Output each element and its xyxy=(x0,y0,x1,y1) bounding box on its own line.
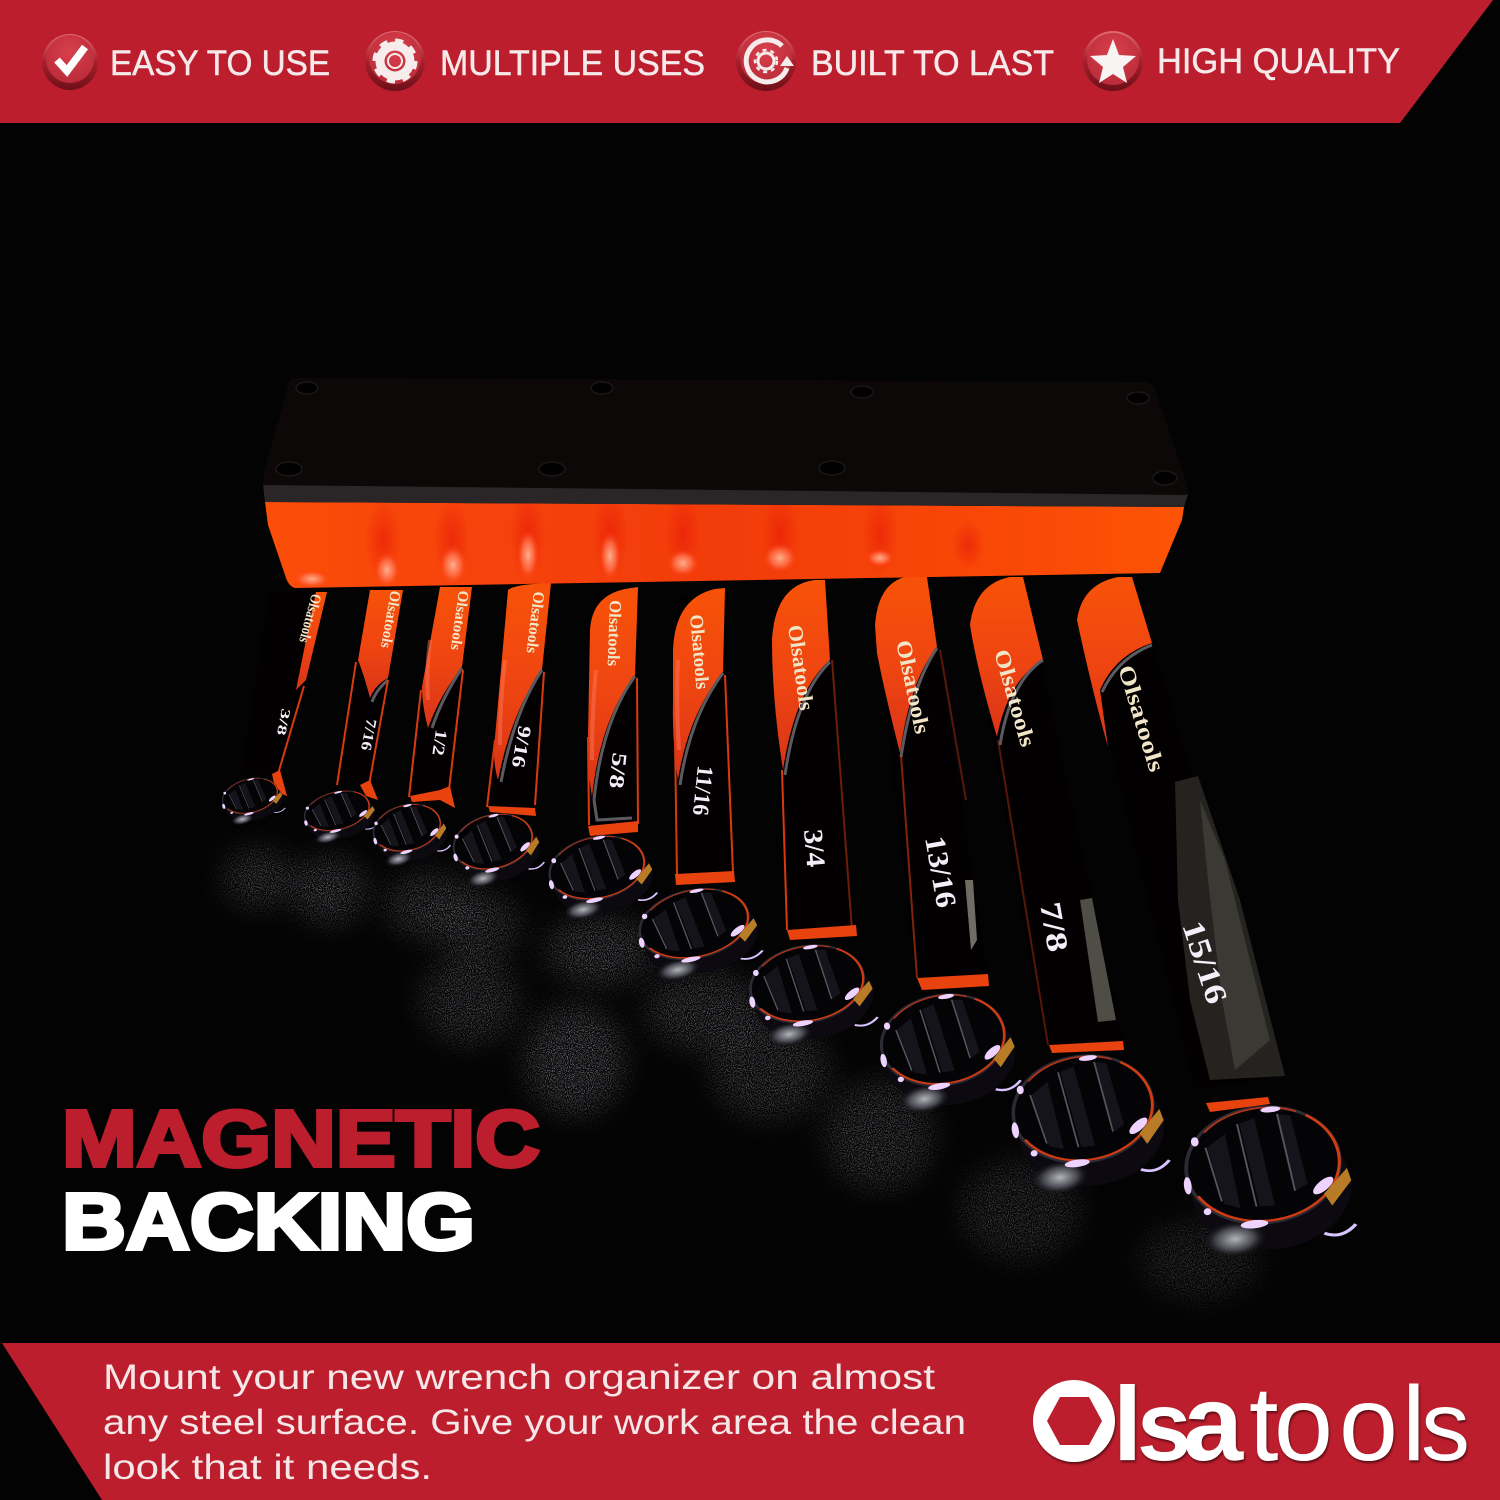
wrench 11/16: 11/16 xyxy=(688,764,718,817)
logo: Olsatools: s xyxy=(1137,1371,1192,1481)
wrench 7/16: 7/16 xyxy=(357,717,379,752)
wrench 13/16 xyxy=(875,577,989,990)
wrench 3/8: 3/8 xyxy=(274,707,294,738)
top banner xyxy=(0,0,1493,123)
wrench 1/2 xyxy=(409,587,472,808)
icon: cycle gear xyxy=(736,31,796,91)
description text: look that it needs. xyxy=(103,1448,432,1487)
magnetic holder xyxy=(263,378,1188,588)
feature: multiple uses xyxy=(365,31,705,91)
feature: multiple uses: MULTIPLE USES xyxy=(440,44,705,83)
wrench 3/4: 3/4 xyxy=(798,828,831,868)
logo: Olsatools: tool xyxy=(1249,1365,1426,1483)
description text xyxy=(103,1358,966,1487)
wrench 9/16 xyxy=(487,583,551,816)
heading: Magnetic Backing: BACKING xyxy=(62,1177,475,1266)
feature: easy to use: EASY TO USE xyxy=(110,44,330,83)
icon: gear xyxy=(365,31,425,91)
wrench 11/16: Olsatools xyxy=(685,614,712,690)
holder glow spots xyxy=(294,490,984,588)
heading: Magnetic Backing xyxy=(62,1094,540,1266)
icon: check mark xyxy=(42,34,98,90)
logo: Olsatools: O xyxy=(1031,1359,1118,1484)
wrench 13/16: Olsatools xyxy=(891,638,935,736)
logo: Olsatools xyxy=(1031,1359,1470,1484)
feature: high quality: HIGH QUALITY xyxy=(1157,42,1400,81)
feature: easy to use xyxy=(42,34,330,90)
wrench 15/16 xyxy=(1077,577,1285,1112)
heading: Magnetic Backing: MAGNETIC xyxy=(62,1094,540,1183)
wrench ring ends xyxy=(217,772,1358,1262)
wrench 3/8: Olsatools xyxy=(295,592,324,645)
wrench 5/8: 5/8 xyxy=(604,751,632,790)
wrench 9/16: Olsatools xyxy=(522,591,547,654)
description text: Mount your new wrench organizer on almost xyxy=(103,1358,935,1397)
holder top plate xyxy=(263,378,1188,495)
wrench 11/16 xyxy=(673,588,735,885)
wrench 3/8 xyxy=(240,592,327,796)
feature: high quality xyxy=(1083,31,1400,91)
wrench 5/8: Olsatools xyxy=(604,600,625,667)
wrench 7/8 xyxy=(970,577,1124,1053)
wrench 7/16: Olsatools xyxy=(377,589,403,649)
feature: built to last: BUILT TO LAST xyxy=(811,44,1054,83)
description text: any steel surface. Give your work area the clean xyxy=(103,1403,966,1442)
wrench 15/16: Olsatools xyxy=(1113,662,1169,775)
logo: Olsatools: s xyxy=(1421,1371,1470,1481)
wrench 3/4: Olsatools xyxy=(783,623,819,712)
textured floor reflections xyxy=(208,833,1271,1313)
wrench 5/8 xyxy=(588,587,638,836)
logo: Olsatools: a xyxy=(1183,1362,1244,1483)
wrench 13/16: 13/16 xyxy=(918,834,962,910)
holder grey magnet edge xyxy=(263,484,1188,507)
logo: Olsatools: l xyxy=(1113,1366,1142,1483)
wrench 7/16 xyxy=(337,589,403,800)
wrench 1/2: Olsatools xyxy=(447,589,471,651)
feature: built to last xyxy=(736,31,1054,91)
wrench 15/16: 15/16 xyxy=(1175,916,1235,1008)
holder orange body xyxy=(265,502,1184,588)
holder screw holes xyxy=(276,382,1177,485)
wrench 3/4 xyxy=(772,580,857,940)
bottom banner xyxy=(2,1343,1500,1500)
wrench 9/16: 9/16 xyxy=(507,724,535,769)
wrench 7/8: Olsatools xyxy=(989,646,1041,750)
product photo: wrench organizer with ten wrenches xyxy=(217,378,1358,1262)
icon: star xyxy=(1083,31,1143,91)
wrench 1/2: 1/2 xyxy=(428,728,451,757)
wrench 7/8: 7/8 xyxy=(1033,899,1074,954)
